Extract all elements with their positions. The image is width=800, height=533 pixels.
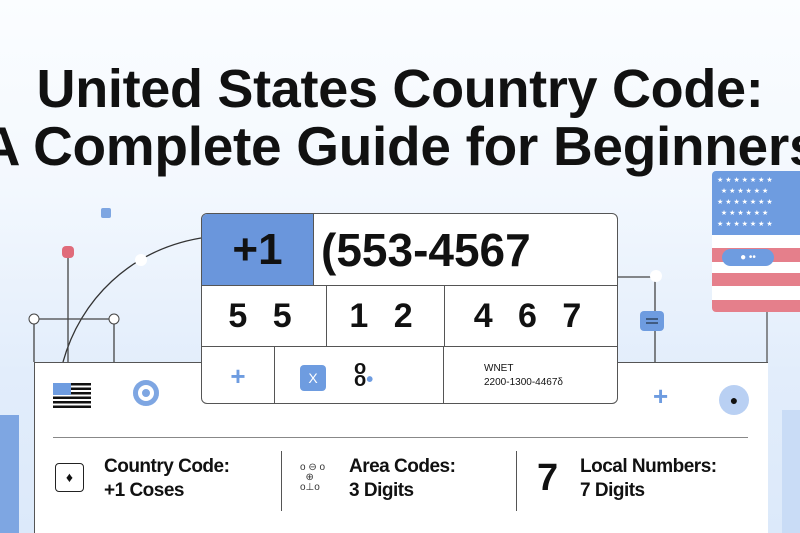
icon: nodes: o⊥o [300, 482, 320, 493]
bottom row: + [230, 360, 246, 390]
phone number card: 1 2 [349, 296, 421, 334]
icon: flag [53, 383, 91, 410]
cell: number: (553-4567 [321, 224, 531, 276]
icon: nodes [300, 462, 325, 493]
flag top right: ● •• [740, 252, 756, 263]
cell: +1: +1 [232, 224, 283, 274]
left blue bar [0, 415, 19, 533]
stat: local numbers: 7 [537, 457, 558, 499]
phone number card: 4 6 7 [474, 296, 589, 334]
flag top right: ★ ★ ★ ★ ★ ★ [721, 188, 768, 195]
bottom row [202, 347, 275, 405]
phone number card [201, 213, 618, 404]
cell: +1 [202, 214, 314, 285]
icon: globe [719, 385, 749, 415]
title: United States Country Code: [37, 59, 763, 119]
flag top right: ★ ★ ★ ★ ★ ★ ★ [717, 221, 773, 228]
icon: plus: + [653, 381, 668, 411]
stat: country code [55, 456, 229, 501]
phone number card: 2200-1300-4467δ [484, 377, 563, 388]
digits row [202, 286, 327, 346]
phone number card: WNET [484, 363, 513, 374]
flag top right: ★ ★ ★ ★ ★ ★ ★ [717, 199, 773, 206]
digits row: 5 5 [228, 296, 300, 334]
phone number card: o• [354, 369, 373, 391]
stat: area codes: Area Codes: [349, 456, 455, 477]
right blue bar [782, 410, 800, 533]
icon: chip: ♦ [66, 469, 73, 485]
stat: local numbers: 7 Digits [580, 480, 645, 501]
icon: user [133, 380, 159, 406]
flag top right: ★ ★ ★ ★ ★ ★ [721, 210, 768, 217]
icon: nodes: o ⊖ o [300, 462, 325, 473]
stat: country code: Country Code: [104, 456, 229, 477]
title [0, 59, 800, 177]
stat: country code: +1 Coses [104, 480, 184, 501]
icon: chip [55, 463, 84, 492]
stat: area codes [300, 456, 455, 501]
icon: globe: ● [730, 392, 738, 408]
phone number card: X [308, 370, 318, 386]
stat: local numbers [537, 456, 717, 501]
phone number card: o [354, 357, 366, 379]
stat: area codes: 3 Digits [349, 480, 414, 501]
icon: nodes: ⊕ [306, 472, 314, 483]
stat: local numbers: Local Numbers: [580, 456, 717, 477]
flag top right [712, 171, 800, 312]
flag top right: ★ ★ ★ ★ ★ ★ ★ [717, 177, 773, 184]
bottom panel [34, 362, 768, 533]
